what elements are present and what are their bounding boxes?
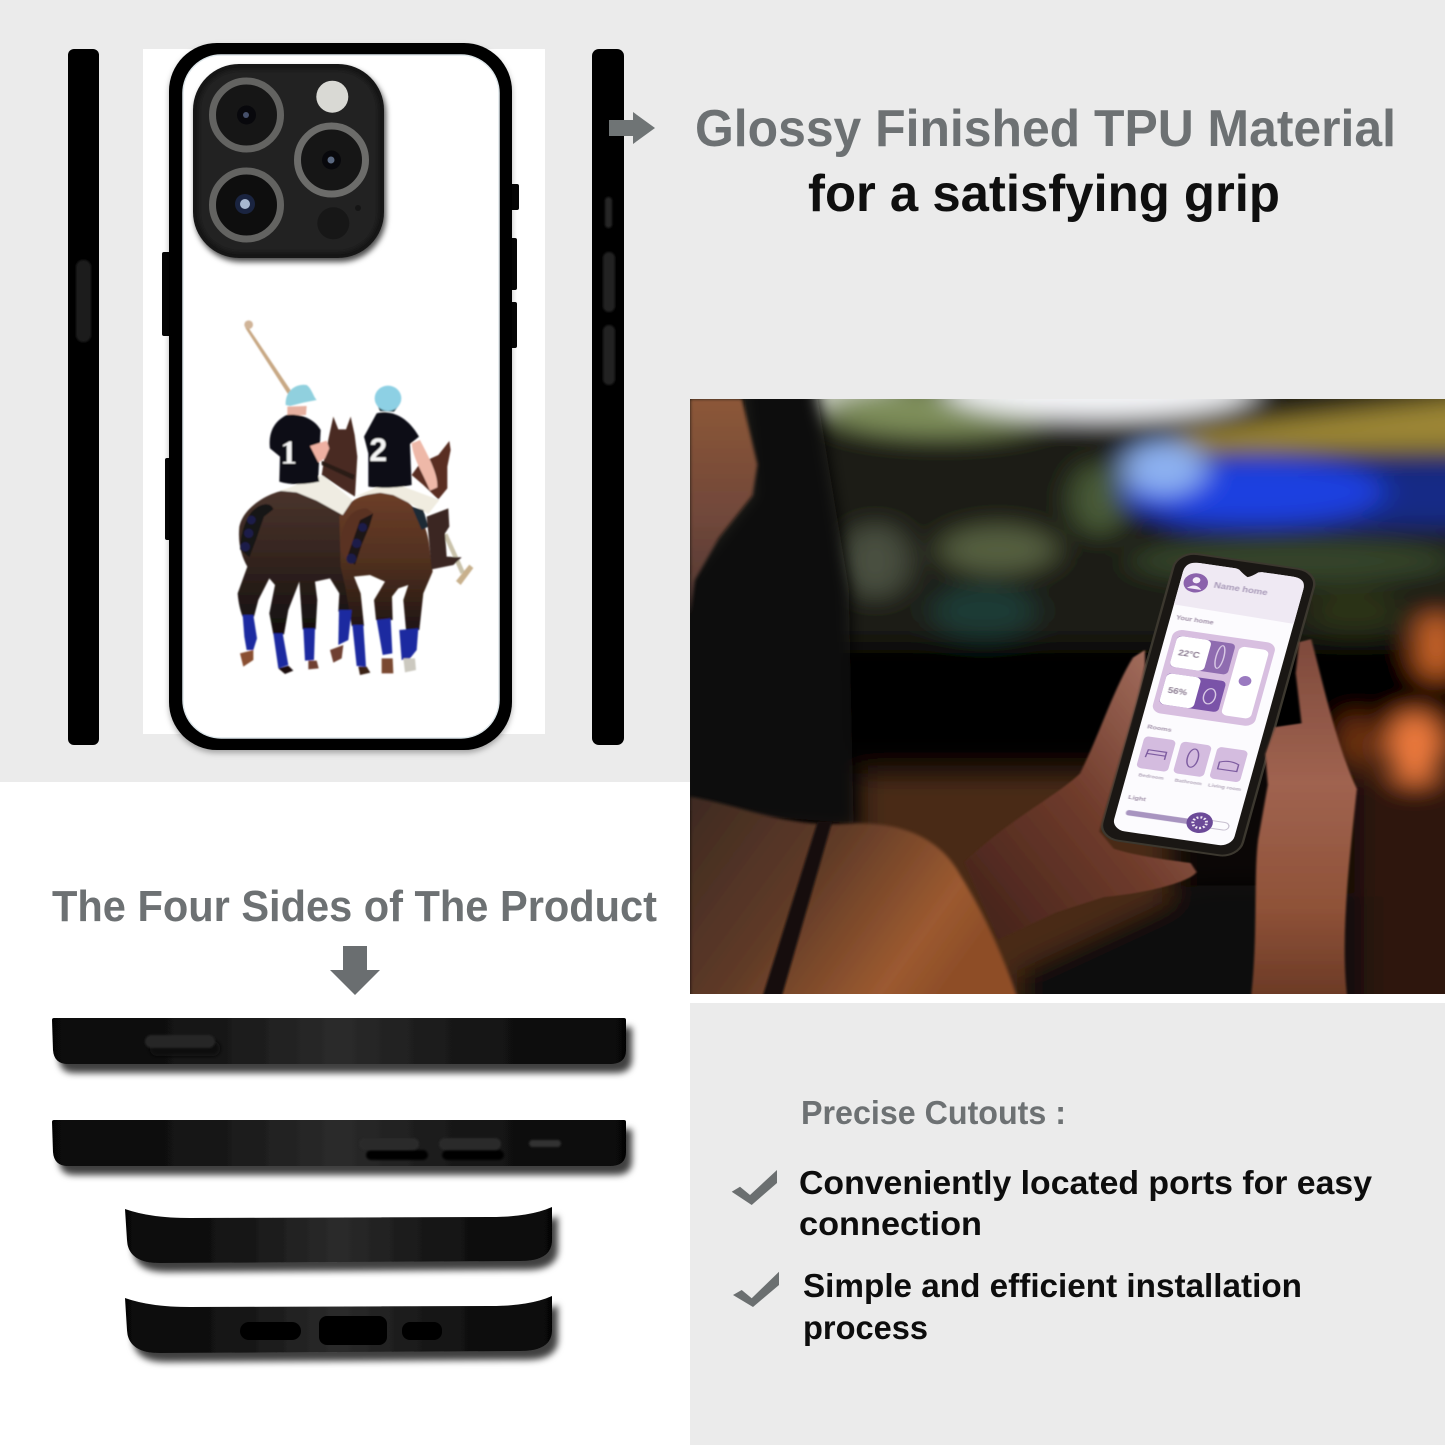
rider 2 trousers bbox=[355, 487, 439, 514]
rider 1 shirt bbox=[270, 415, 321, 484]
humidity tile: 56% bbox=[1167, 686, 1188, 697]
feature two: Simple and efficient installation bbox=[803, 1267, 1302, 1304]
hooves bbox=[240, 645, 416, 675]
panel: top right grey bbox=[690, 0, 1445, 399]
side view: bottom edge with port cutouts bbox=[125, 1296, 552, 1353]
rider 2 shirt bbox=[364, 412, 419, 488]
rider 2 boot bbox=[412, 507, 462, 569]
polo players artwork bbox=[238, 320, 473, 675]
brightness slider bbox=[1125, 810, 1230, 833]
phone body bbox=[1098, 551, 1318, 858]
lowered mallet bbox=[443, 533, 473, 585]
rider 1 helmet bbox=[286, 385, 317, 406]
rider 2 number: 2 bbox=[369, 432, 387, 468]
light label: Light bbox=[1127, 795, 1147, 803]
leg wraps bbox=[243, 610, 418, 668]
feature two: process bbox=[803, 1309, 928, 1346]
room names: Living room bbox=[1207, 783, 1242, 793]
rooms label: Rooms bbox=[1146, 724, 1173, 734]
arrow: pointing down to side views bbox=[330, 946, 380, 995]
left edge view of case bbox=[68, 49, 99, 745]
phone screen bbox=[1111, 560, 1307, 847]
heading line two: for a satisfying grip bbox=[808, 165, 1280, 223]
rider 1 number: 1 bbox=[280, 434, 297, 471]
horse 1 head bbox=[322, 417, 357, 497]
lens: top bbox=[212, 81, 280, 149]
flash bbox=[316, 81, 348, 113]
notch bbox=[1236, 568, 1262, 578]
room names: Bathroom bbox=[1174, 778, 1203, 787]
panel: phone case back and sides bbox=[68, 43, 624, 750]
subheading: Precise Cutouts : bbox=[801, 1094, 1066, 1131]
room names bbox=[1138, 773, 1242, 791]
avatar bbox=[1184, 573, 1208, 592]
panel: lifestyle photo of hands holding a phone bbox=[690, 399, 1445, 994]
temperature tile bbox=[1169, 636, 1236, 675]
text block: precise cutouts bbox=[732, 1094, 1373, 1346]
heading line one: Glossy Finished TPU Material bbox=[695, 100, 1396, 158]
left hand bbox=[964, 650, 1197, 940]
right edge view of case bbox=[592, 49, 624, 745]
horse 2 body bbox=[339, 492, 433, 630]
room names: Bedroom bbox=[1138, 773, 1165, 782]
app header bbox=[1173, 561, 1306, 624]
case image white backdrop bbox=[143, 49, 545, 734]
panel: bottom right grey bbox=[690, 1003, 1445, 1445]
panel: top left grey bbox=[0, 0, 690, 782]
side view: power and sim edge bbox=[52, 1120, 626, 1166]
icon: check mark one bbox=[732, 1170, 777, 1205]
horse tails bbox=[240, 504, 373, 565]
phone case front bbox=[162, 43, 519, 750]
rider 1 trousers bbox=[278, 476, 353, 515]
dress strap bbox=[762, 822, 832, 997]
woman face bbox=[690, 399, 757, 615]
feature one: Conveniently located ports for easy bbox=[799, 1164, 1373, 1201]
rider 1 neck bbox=[287, 406, 307, 416]
room tiles bbox=[1136, 736, 1248, 783]
camera module bbox=[193, 64, 384, 258]
woman shoulder bbox=[690, 797, 1017, 997]
rider 2 arm bbox=[412, 440, 437, 491]
feature one: connection bbox=[799, 1205, 982, 1242]
horse 1 body bbox=[238, 489, 353, 634]
feature two bbox=[803, 1267, 1302, 1346]
rider 2 helmet bbox=[375, 386, 401, 412]
right hand bbox=[1251, 639, 1357, 997]
app title: Name home bbox=[1213, 581, 1269, 598]
feature one bbox=[799, 1164, 1373, 1242]
humidity tile bbox=[1159, 673, 1227, 712]
lens: bottom bbox=[212, 171, 280, 239]
blurred landscape background bbox=[690, 399, 1445, 994]
your home label: Your home bbox=[1175, 615, 1214, 626]
add tile bbox=[1221, 646, 1269, 719]
temperature tile: 22°C bbox=[1177, 648, 1202, 660]
side view: volume button edge bbox=[52, 1018, 626, 1064]
climate card bbox=[1151, 629, 1277, 727]
raised mallet bbox=[244, 320, 298, 404]
lidar sensor bbox=[317, 207, 349, 239]
lens: right bbox=[298, 126, 366, 194]
icon: check mark two bbox=[733, 1272, 779, 1307]
woman hair silhouette bbox=[690, 399, 860, 822]
arrow: pointing to glossy material text bbox=[609, 112, 655, 144]
side view: top edge bbox=[125, 1207, 552, 1263]
heading: glossy finished material bbox=[695, 100, 1396, 223]
rider 1 arm bbox=[310, 441, 329, 462]
microphone bbox=[355, 205, 361, 211]
horse 2 head bbox=[412, 441, 451, 499]
heading: the four sides: The Four Sides of The Product bbox=[52, 882, 657, 931]
